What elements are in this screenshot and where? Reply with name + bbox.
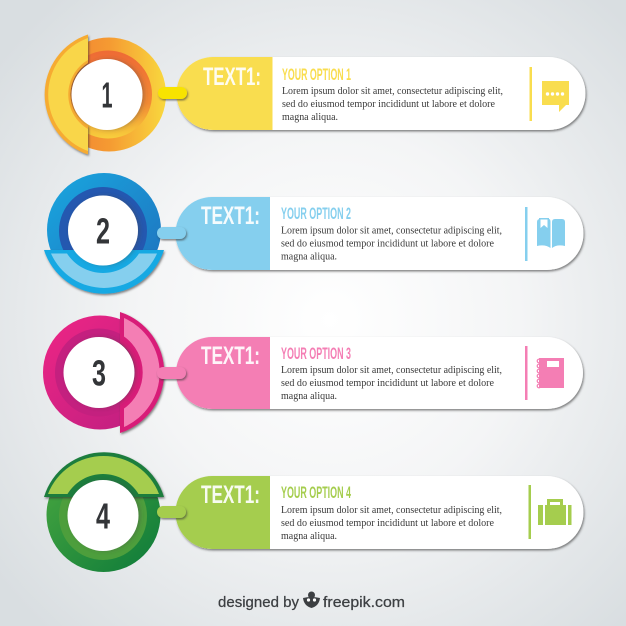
step 4 label: TEXT1: — [201, 481, 260, 509]
step 1 body text: sed do eiusmod tempor incididunt ut labore et dolore — [282, 99, 495, 110]
step 4 heading: YOUR OPTION 4 — [281, 484, 351, 502]
step 1 circle — [45, 34, 166, 154]
step 1 heading: YOUR OPTION 1 — [282, 66, 351, 84]
step 4 group — [44, 452, 584, 572]
step 4 connector — [157, 506, 186, 518]
step 3 group — [43, 312, 583, 433]
step 1 label: TEXT1: — [203, 63, 261, 91]
step 4 body text — [281, 505, 502, 542]
number 4: 4 — [96, 496, 110, 536]
number 3: 3 — [92, 352, 106, 394]
step 4 body text: sed do eiusmod tempor incididunt ut labore et dolore — [281, 518, 494, 529]
step 4 circle — [44, 452, 164, 572]
number 1: 1 — [102, 74, 112, 116]
step 1 body text: magna aliqua. — [282, 112, 338, 123]
step 2 body text: sed do eiusmod tempor incididunt ut labore et dolore — [281, 238, 494, 250]
step 3 connector — [157, 367, 186, 379]
step 1 banner — [158, 57, 586, 130]
step 3 heading: YOUR OPTION 3 — [281, 345, 351, 363]
step 2 banner — [157, 197, 584, 270]
step 1 yellow arc segment — [45, 34, 88, 154]
step 2 blue arc segment — [44, 250, 164, 294]
step 2 body text — [281, 226, 502, 262]
icon: open book — [537, 218, 565, 248]
footer credit — [218, 592, 405, 611]
icon: freepik logo — [303, 592, 320, 608]
step 3 body text: magna aliqua. — [281, 391, 337, 402]
number 2: 2 — [96, 210, 110, 252]
step 1 body text — [282, 86, 503, 123]
step 2 circle — [44, 173, 164, 294]
footer credit: freepik.com — [323, 595, 405, 611]
step 3 body text — [281, 365, 502, 402]
step 4 body text: Lorem ipsum dolor sit amet, consectetur adipiscing elit, — [281, 505, 502, 516]
step 1 body text: Lorem ipsum dolor sit amet, consectetur adipiscing elit, — [282, 86, 503, 97]
icon: notebook — [537, 358, 564, 388]
step 2 body text: Lorem ipsum dolor sit amet, consectetur adipiscing elit, — [281, 226, 502, 236]
step 1 connector — [158, 87, 187, 99]
step 1 group — [45, 34, 586, 154]
step 3 label: TEXT1: — [201, 342, 260, 370]
step 4 green arc segment — [44, 452, 164, 497]
icon: briefcase — [538, 499, 572, 525]
step 3 pink arc segment — [120, 312, 164, 433]
step 3 body text: sed do eiusmod tempor incididunt ut labore et dolore — [281, 378, 494, 389]
step 3 circle — [43, 312, 164, 433]
step 3 body text: Lorem ipsum dolor sit amet, consectetur adipiscing elit, — [281, 365, 502, 376]
step 2 body text: magna aliqua. — [281, 252, 337, 262]
icon: speech bubble — [542, 81, 569, 112]
step 2 label: TEXT1: — [201, 202, 260, 230]
step 4 body text: magna aliqua. — [281, 531, 337, 542]
step 2 connector — [157, 227, 186, 239]
step 2 group — [44, 173, 584, 294]
step 2 heading: YOUR OPTION 2 — [281, 205, 351, 223]
footer credit: designed by — [218, 595, 300, 611]
step 3 banner — [157, 337, 583, 409]
step 4 banner — [157, 476, 584, 549]
